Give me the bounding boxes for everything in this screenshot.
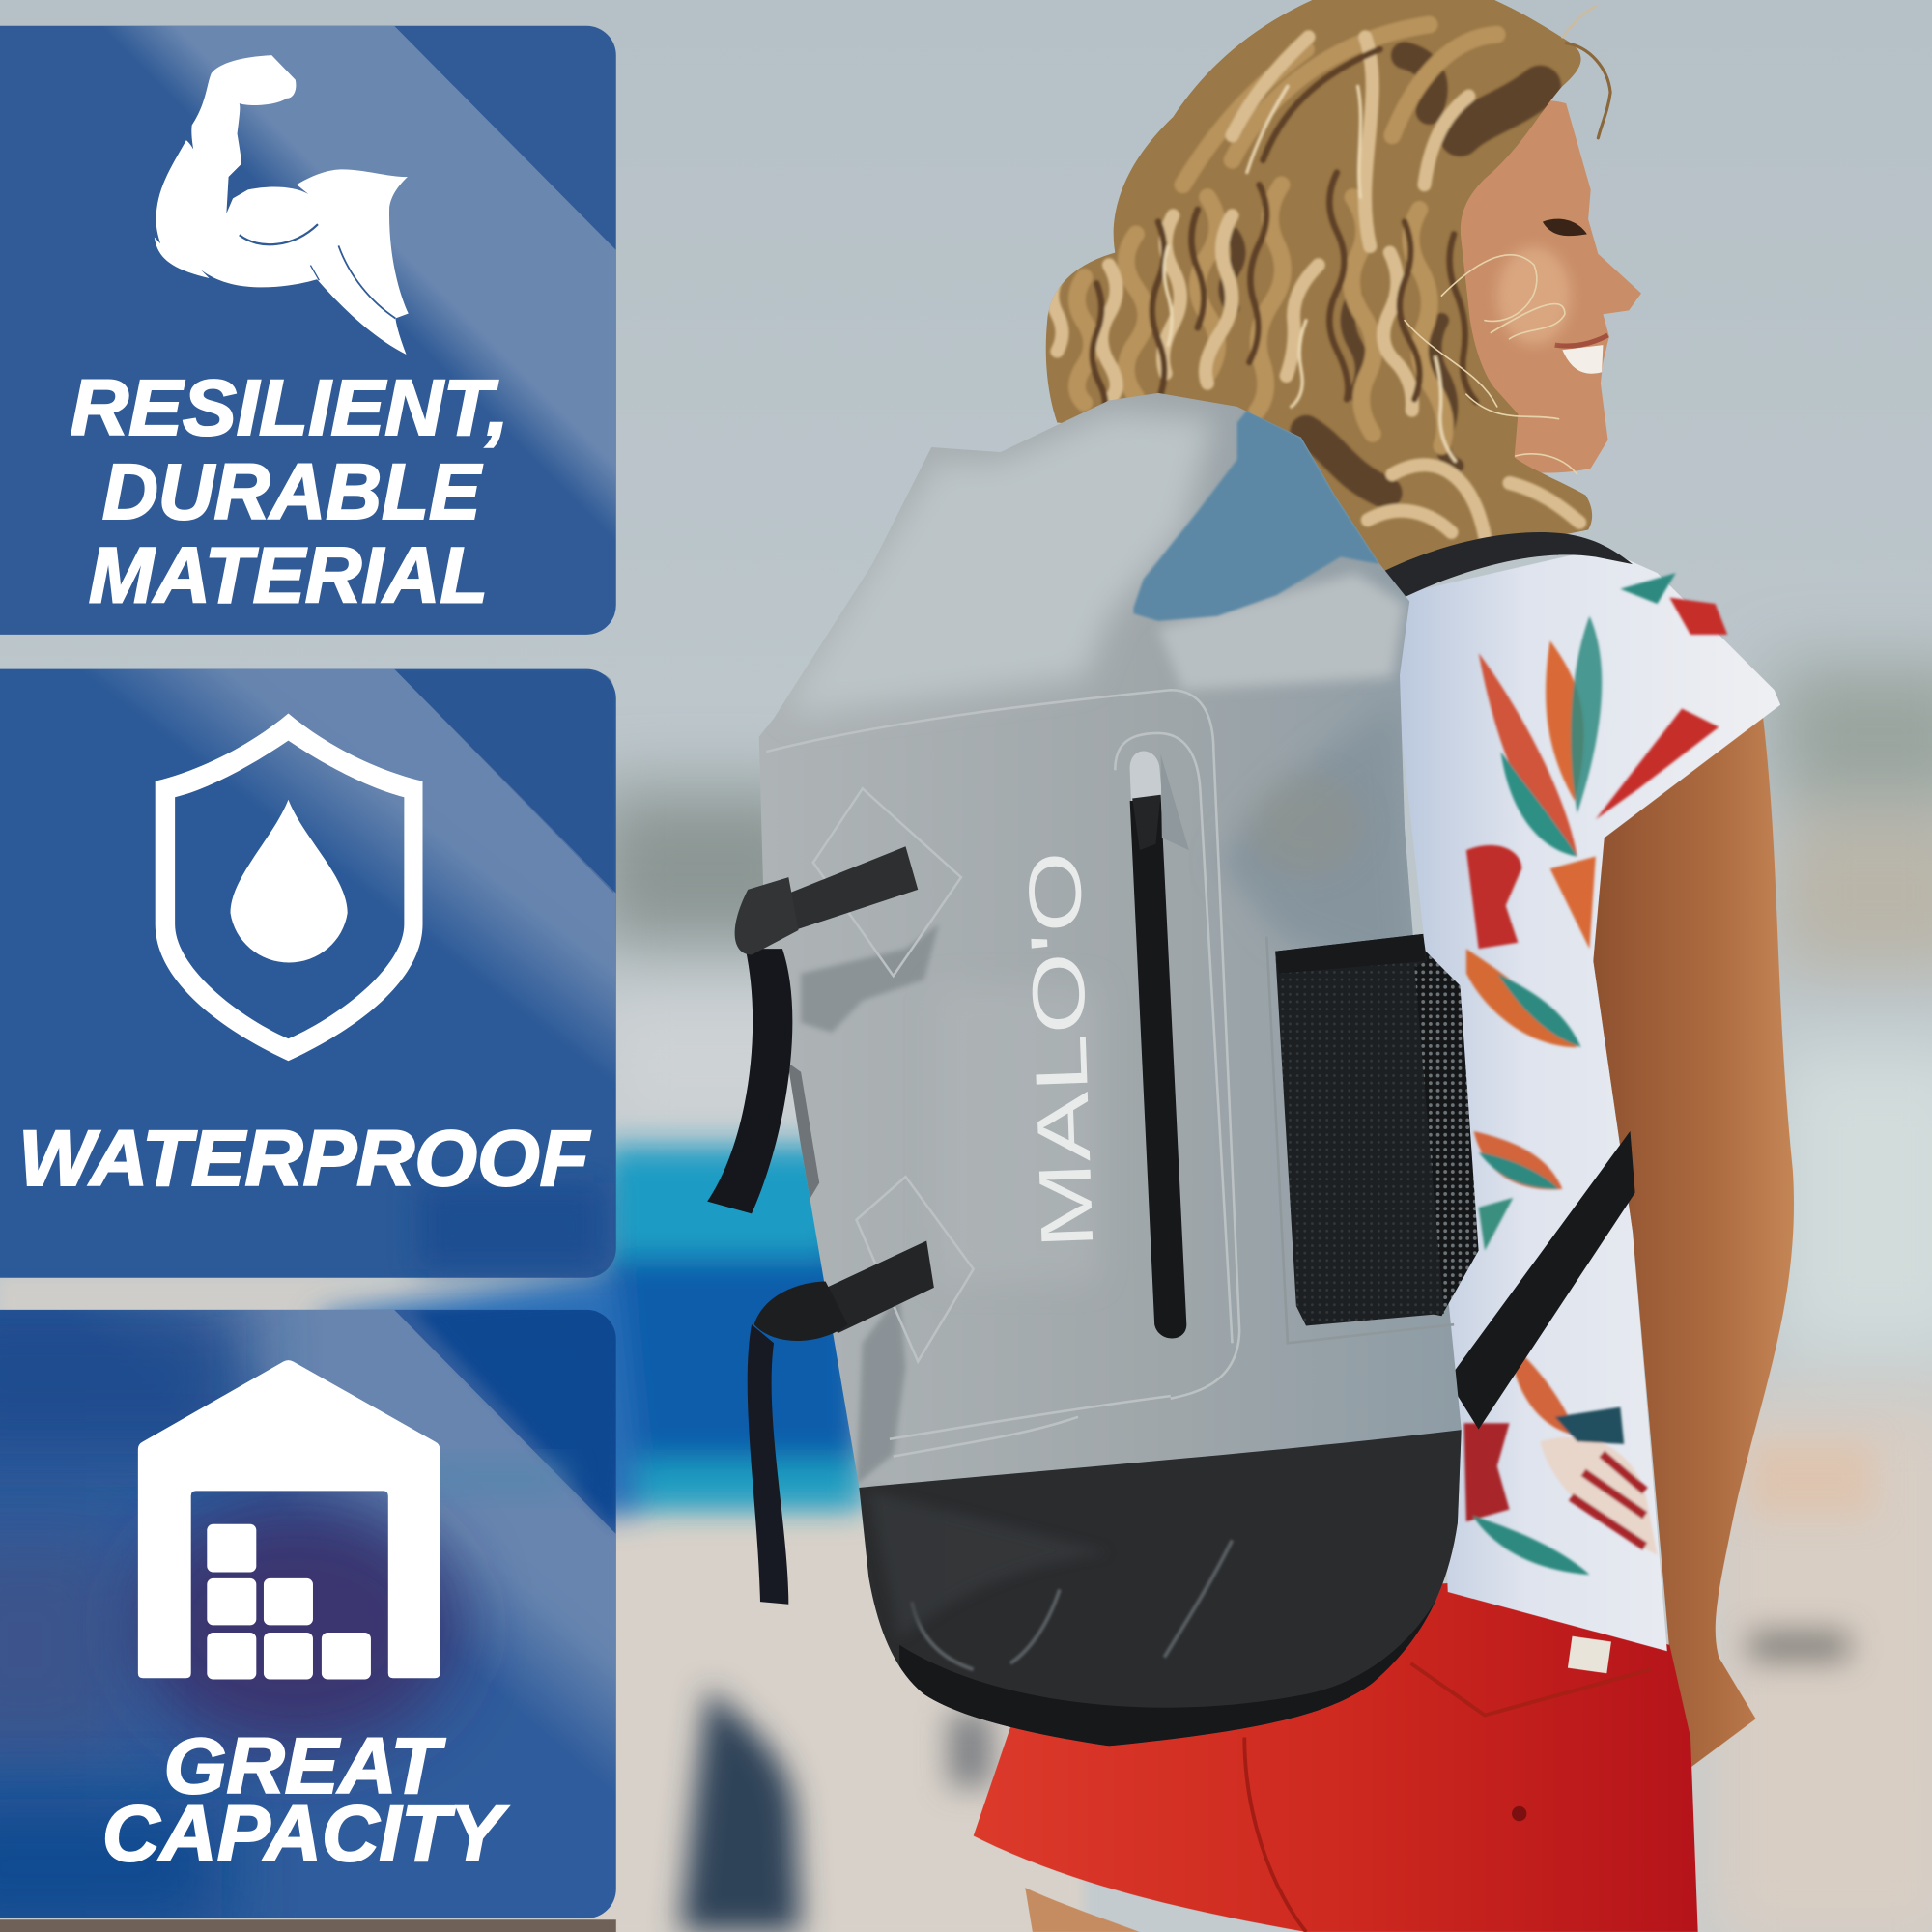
heading lines [71,364,509,620]
icon: warehouse with boxes [138,1360,440,1680]
light diagonal band [0,1310,616,1932]
side strap [1448,1131,1635,1430]
seams [766,690,1454,1457]
logo text on bag: MALO'O [1013,850,1109,1250]
heading lines: MATERIAL [89,532,488,620]
heading: WATERPROOF [18,1115,591,1203]
bag shadows [801,924,939,1033]
heading lines: DURABLE [102,448,483,536]
fly-away strands [1405,6,1610,474]
woman's arm [1593,708,1794,1770]
side panel [789,1065,819,1199]
icon: shield with water drop [156,714,422,1061]
shoulder strap [1380,532,1633,600]
bottom edge strip [0,1919,616,1932]
zipper [1130,752,1189,1339]
curly hair [1035,0,1614,604]
black bottom [850,1430,1466,1762]
panel: resilient, durable material [0,26,616,690]
blue shadow fold [1133,411,1380,621]
panel: great capacity [0,1293,640,1932]
backpack [707,393,1479,1762]
heading lines: CAPACITY [102,1790,509,1878]
wavy fall: blonde highlights [1052,37,1579,536]
hair shadows [1226,55,1540,493]
fine highlights [1164,86,1455,461]
icon: flexed arm [155,55,409,355]
wavy fall: dark lines [1093,49,1476,419]
heading lines: GREAT [164,1722,446,1810]
roll-top highlights [788,412,1213,715]
shorts [974,1583,1698,1932]
heading lines: RESILIENT, [71,364,509,452]
mesh side pocket [1275,934,1479,1325]
wavy fall: mid tones [1077,25,1497,446]
panel: waterproof [0,669,616,1333]
facial features [1497,219,1608,374]
light diagonal band [111,26,616,531]
floral shirt [1386,549,1780,1651]
lower compression strap [748,1240,934,1605]
bag body [759,393,1462,1746]
light diagonal band [99,668,616,1070]
heading lines [102,1722,509,1878]
face [1417,100,1641,472]
photo: woman [974,0,1794,1932]
upper compression strap [707,846,918,1213]
